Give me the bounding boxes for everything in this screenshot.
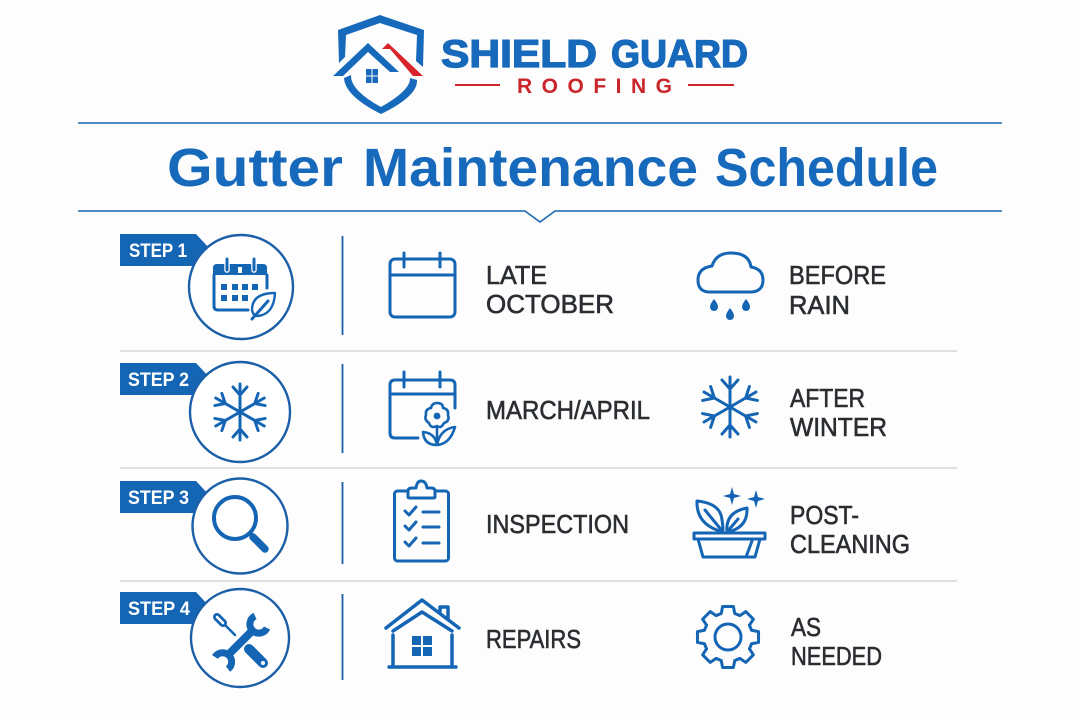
logo red rules <box>455 84 734 86</box>
step 4 badge <box>120 592 210 624</box>
panel: step 1 row <box>120 234 886 339</box>
logo subtitle: ROOFING <box>517 75 672 98</box>
text: late october <box>486 260 614 319</box>
text: post-cleaning: POST- <box>790 500 859 530</box>
icon: snowflake in circle <box>190 362 290 462</box>
icon: rain cloud <box>698 253 763 320</box>
icon: shield with house roof <box>333 15 424 114</box>
text: post-cleaning: CLEANING <box>790 529 910 559</box>
text: march/april: MARCH/APRIL <box>486 395 650 425</box>
title: Gutter <box>167 138 343 198</box>
text: as needed <box>791 612 882 671</box>
logo name: GUARD <box>611 33 748 76</box>
icon: plant in gutter tray <box>694 487 765 557</box>
text: as needed: AS <box>791 612 821 642</box>
logo name: SHIELD <box>441 33 597 76</box>
text: after winter: AFTER <box>790 383 865 413</box>
text: as needed: NEEDED <box>791 641 882 671</box>
text: late october: OCTOBER <box>486 289 614 319</box>
icon: calendar with flower <box>390 372 455 445</box>
icon: calendar <box>390 253 455 317</box>
text: late october: LATE <box>486 260 547 290</box>
step 1 badge <box>120 234 210 266</box>
text: after winter: WINTER <box>790 412 887 442</box>
text: post-cleaning <box>790 500 910 559</box>
logo: Shield Guard Roofing <box>333 15 748 114</box>
step 3 badge: STEP 3 <box>128 488 189 509</box>
icon: magnifier in circle <box>192 478 288 574</box>
step 4 badge: STEP 4 <box>128 599 190 620</box>
panel: step 2 row <box>120 362 887 462</box>
step 3 badge <box>120 481 210 513</box>
step 2 badge: STEP 2 <box>128 370 189 391</box>
icon: snowflake <box>700 377 760 437</box>
text: inspection: INSPECTION <box>486 509 629 539</box>
step 2 badge <box>120 363 210 395</box>
step 1 badge: STEP 1 <box>129 241 187 262</box>
text: before rain: RAIN <box>789 290 850 320</box>
text: before rain: BEFORE <box>789 260 886 290</box>
icon: house <box>386 600 459 667</box>
panel: step 3 row <box>120 478 910 574</box>
title <box>167 138 938 198</box>
title: Maintenance <box>363 138 698 198</box>
icon: gear <box>697 606 759 668</box>
icon: calendar with leaf in circle <box>189 235 293 339</box>
icon: wrench and screwdriver in circle <box>191 589 289 687</box>
text: repairs: REPAIRS <box>486 624 581 654</box>
text: before rain <box>789 260 886 320</box>
icon: clipboard checklist <box>394 481 448 561</box>
logo name <box>441 33 748 76</box>
text: after winter <box>790 383 887 442</box>
panel: step 4 row <box>120 589 882 687</box>
title: Schedule <box>715 138 938 198</box>
